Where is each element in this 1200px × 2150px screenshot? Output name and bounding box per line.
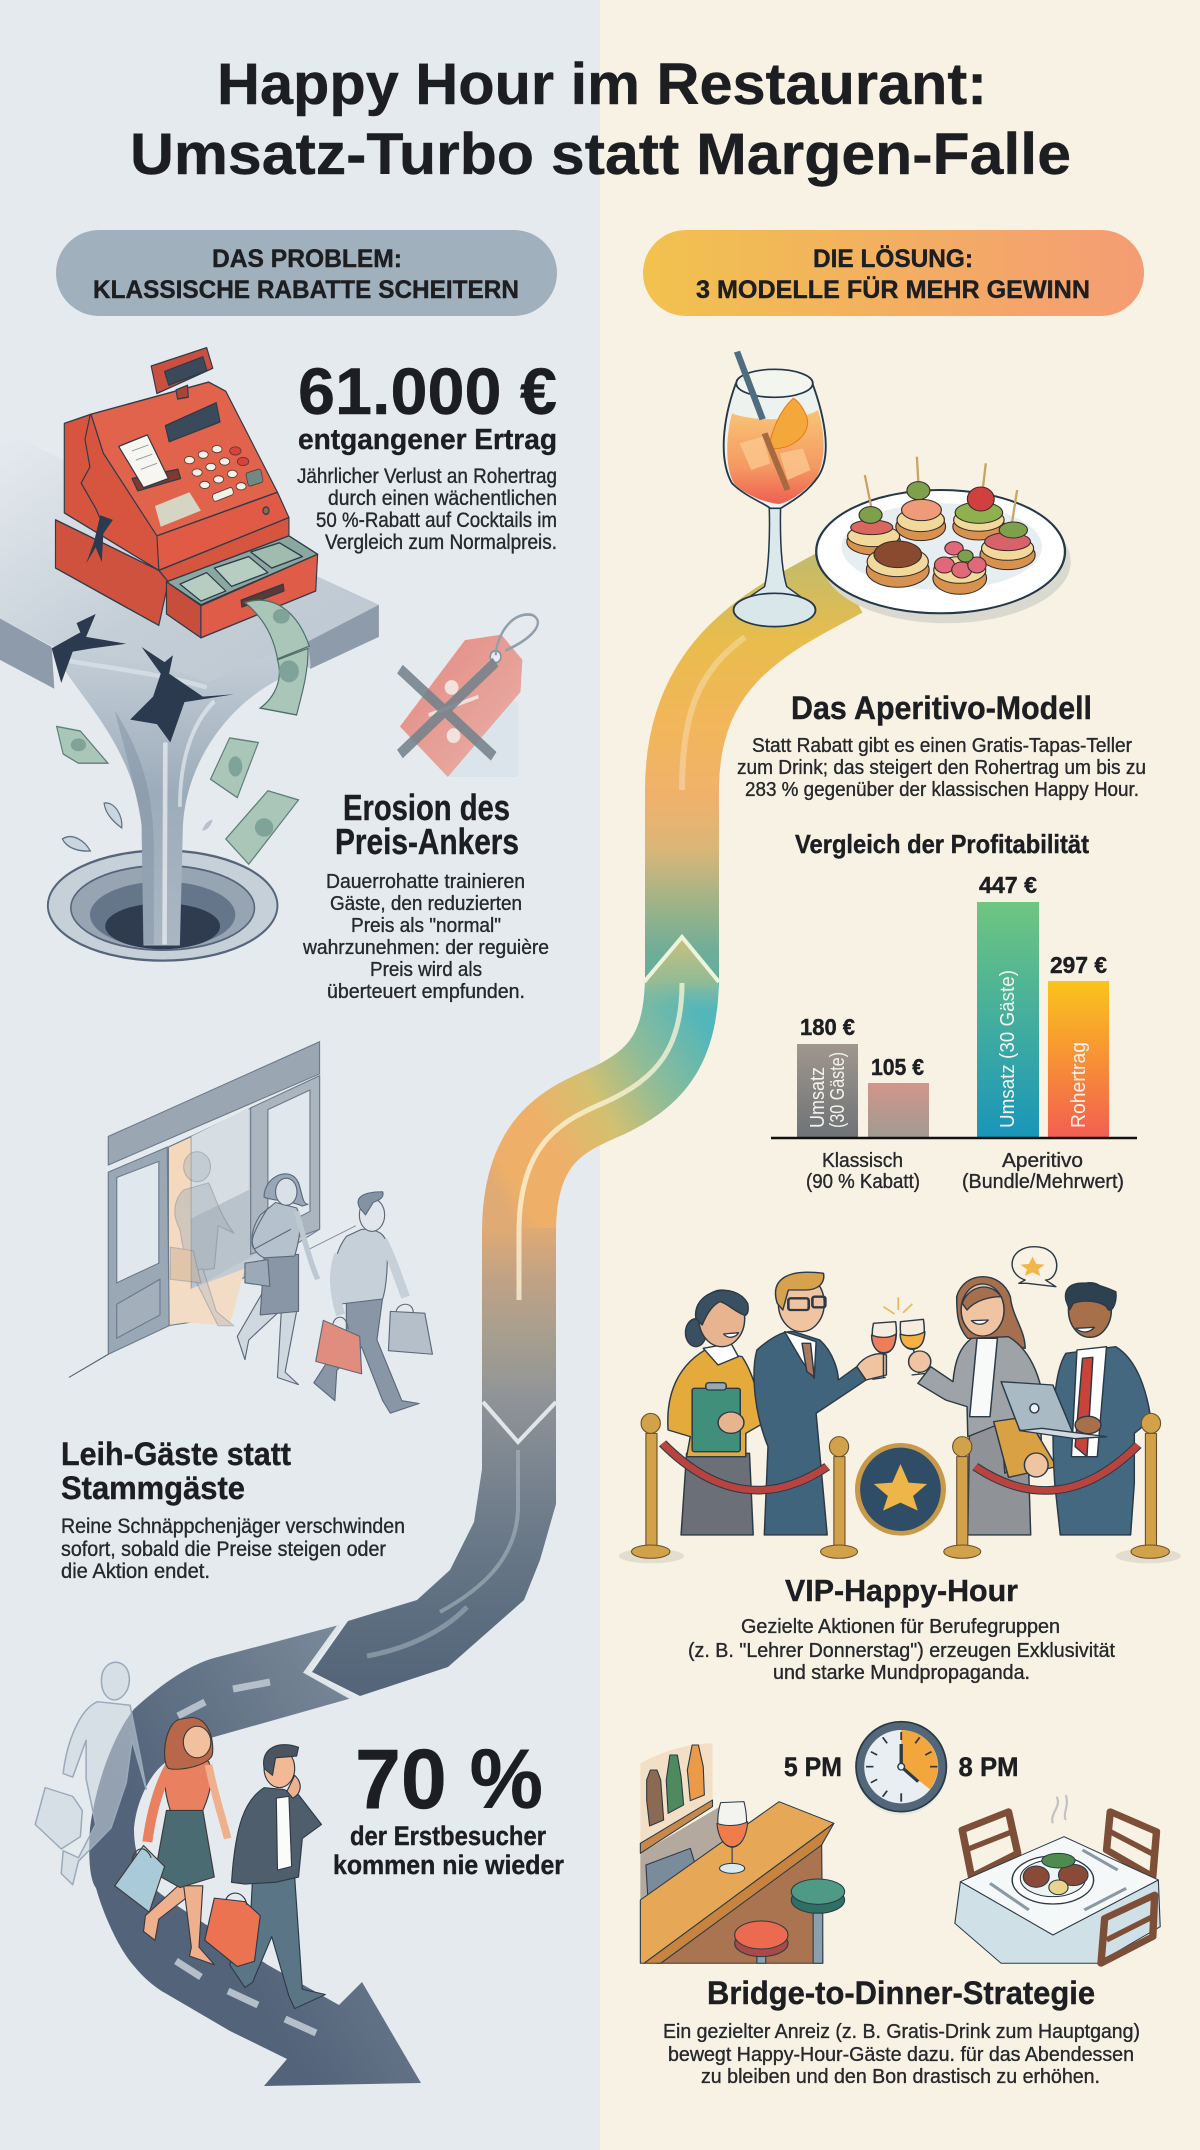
chart heading: Vergleich der Profitabilität: [795, 829, 1089, 859]
background: solution side: [600, 0, 1200, 2150]
text: VIP happy hour: VIP-Happy-Hour: [785, 1573, 1018, 1608]
rope barrier with posts: [619, 1413, 1181, 1563]
text: bridge to dinner: Ein gezielter Anreiz (z. B. Gratis-Drink zum Hauptgang): [663, 2021, 1140, 2043]
illustration: guests leaving restaurant door: [69, 1042, 432, 1413]
stat: 61.000 € lost margin: 50 %-Rabatt auf Cocktails im: [316, 509, 557, 532]
icon: crossed out price tag: [400, 615, 538, 777]
bar chart: profitability comparison: [771, 829, 1137, 1193]
VIP star badge: [858, 1445, 943, 1533]
text: aperitivo model: Das Aperitivo-Modell: [791, 690, 1092, 726]
text: VIP happy hour: (z. B. "Lehrer Donnerstag") erzeugen Exklusivität: [688, 1640, 1115, 1662]
illustration: bar, clock and dinner table: [640, 1722, 1160, 1963]
title: Happy Hour im Restaurant:: [217, 52, 987, 117]
text: bridge to dinner: Bridge-to-Dinner-Strategie: [707, 1975, 1095, 2011]
text: borrowed guests: Stammgäste: [61, 1470, 245, 1506]
water drops: [62, 803, 213, 851]
bar value labels: 180 €: [800, 1014, 855, 1040]
text: borrowed guests: die Aktion endet.: [61, 1560, 210, 1583]
stat: 61.000 € lost margin: durch einen wächentlichen: [328, 487, 557, 510]
text: bridge to dinner: bewegt Happy-Hour-Gäste dazu. für das Abendessen: [668, 2044, 1134, 2066]
heading pill: problem: DAS PROBLEM:: [212, 245, 402, 273]
rotated bar labels: Umsatz: [807, 1067, 829, 1128]
person: teacher: [668, 1290, 806, 1535]
rotated bar labels: (30 Gäste): [827, 1052, 849, 1128]
rotated bar labels: Rohertrag: [1068, 1042, 1090, 1128]
text: borrowed guests: sofort, sobald die Preise steigen oder: [61, 1538, 386, 1561]
falling banknotes: [57, 726, 299, 864]
heading pill: solution: 3 MODELLE FÜR MEHR GEWINN: [696, 275, 1090, 304]
group labels: Aperitivo: [1002, 1150, 1083, 1172]
text: borrowed guests: Leih-Gäste statt: [61, 1436, 291, 1472]
person: woman in grey blazer: [909, 1277, 1057, 1535]
stat: 70 % never return: kommen nie wieder: [333, 1850, 564, 1880]
ghost guest: [35, 1662, 146, 1885]
dinner table with chairs: [955, 1795, 1160, 1963]
group labels: (Bundle/Mehrwert): [962, 1171, 1124, 1193]
bar: aperitivo revenue: [977, 902, 1039, 1138]
text: aperitivo model: [737, 690, 1146, 801]
cocktail glass: [724, 352, 826, 627]
time labels: 8 PM: [959, 1752, 1019, 1782]
bar value labels: 297 €: [1050, 952, 1107, 978]
banknote falling from drawer: [245, 600, 309, 715]
text: price anchor erosion: [302, 787, 549, 1003]
illustration: VIP professionals toasting behind rope: [619, 1247, 1181, 1563]
woman walking away: [237, 1174, 318, 1385]
text: borrowed guests: Reine Schnäppchenjäger verschwinden: [61, 1515, 405, 1538]
arrow: central road from grey problem path to colourful solution path: [483, 580, 845, 1442]
text: price anchor erosion: Preis-Ankers: [335, 821, 519, 862]
stat: 61.000 € lost margin: Vergleich zum Normalpreis.: [325, 531, 557, 554]
bar value labels: 105 €: [871, 1054, 924, 1080]
stat: 61.000 € lost margin: entgangener Ertrag: [298, 424, 557, 456]
text: price anchor erosion: wahrzunehmen: der reguière: [302, 937, 549, 959]
arrow: lower road turning down to exit: [89, 1402, 556, 2086]
man walking away with bags: [314, 1192, 432, 1413]
time labels: 5 PM: [784, 1752, 842, 1782]
leak funnel: [54, 642, 311, 945]
text: price anchor erosion: Gäste, den reduzierten: [330, 893, 522, 915]
register crack: [81, 414, 113, 563]
text: price anchor erosion: überteuert empfunden.: [327, 981, 525, 1003]
text: price anchor erosion: Erosion des: [343, 787, 510, 828]
heading pill: problem: [56, 230, 557, 316]
time labels: [784, 1752, 1019, 1782]
rotated bar labels: Umsatz (30 Gäste): [997, 970, 1019, 1128]
stat: 70 % never return: [333, 1732, 564, 1880]
title: [130, 52, 1071, 187]
text: aperitivo model: 283 % gegenüber der klassischen Happy Hour.: [745, 779, 1139, 801]
text: VIP happy hour: [688, 1573, 1115, 1684]
door frame: [69, 1042, 356, 1377]
clock: 5 PM to 8 PM: [856, 1722, 946, 1815]
drain: [48, 850, 277, 961]
stat: 61.000 € lost margin: [297, 354, 557, 554]
text: borrowed guests: [61, 1436, 405, 1583]
cracks in counter: [52, 614, 234, 743]
woman with blue bag: [115, 1717, 228, 1965]
faded woman leaving: [170, 1152, 233, 1326]
person: suit man with glasses: [754, 1272, 886, 1535]
illustration: cracked counter, leaking drain and cash register: [0, 348, 379, 961]
bar: classic revenue: [797, 1044, 858, 1138]
heading pill: problem: KLASSISCHE RABATTE SCHEITERN: [93, 276, 519, 304]
bar value labels: 447 €: [979, 872, 1037, 898]
tapas canapes: [847, 457, 1035, 594]
counter slab: [0, 430, 379, 689]
man with orange bag: [205, 1745, 325, 2009]
keypad keys: [184, 445, 263, 502]
group labels: [806, 1150, 1124, 1193]
stat: 61.000 € lost margin: Jährlicher Verlust an Rohertrag: [297, 465, 557, 488]
text: price anchor erosion: Dauerrohatte trainieren: [326, 871, 525, 893]
heading pill: solution: DIE LÖSUNG:: [813, 244, 973, 273]
clinking wine glasses: [872, 1297, 926, 1379]
person: man with laptop: [1001, 1283, 1151, 1535]
bar: aperitivo margin: [1048, 981, 1109, 1138]
stat: 70 % never return: 70 %: [355, 1732, 543, 1826]
group labels: (90 % Kabatt): [806, 1171, 920, 1193]
plate: [816, 490, 1071, 623]
bar counter with bottles and stools: [640, 1743, 845, 1963]
text: bridge to dinner: zu bleiben und den Bon drastisch zu erhöhen.: [701, 2066, 1100, 2088]
text: aperitivo model: Statt Rabatt gibt es einen Gratis-Tapas-Teller: [752, 735, 1132, 757]
cash drawer: [166, 536, 318, 638]
text: price anchor erosion: Preis wird als: [370, 959, 482, 981]
text: VIP happy hour: und starke Mundpropaganda.: [773, 1662, 1030, 1684]
text: aperitivo model: zum Drink; das steigert den Rohertrag um bis zu: [737, 757, 1146, 779]
heading pill: solution: [643, 230, 1144, 316]
text: price anchor erosion: Preis als "normal": [351, 915, 501, 937]
background: problem side: [0, 0, 600, 2150]
bar value labels: [800, 872, 1107, 1080]
stat: 61.000 € lost margin: 61.000 €: [298, 354, 557, 428]
illustration: guests walking away on road: [35, 1662, 325, 2009]
cash register: [55, 348, 289, 625]
text: bridge to dinner: [663, 1975, 1140, 2088]
group labels: Klassisch: [822, 1150, 903, 1172]
illustration: aperitivo drink and tapas plate: [724, 352, 1071, 627]
stat: 70 % never return: der Erstbesucher: [350, 1821, 546, 1851]
speech bubble with star: [1012, 1247, 1057, 1287]
title: Umsatz-Turbo statt Margen-Falle: [130, 122, 1071, 187]
bar: classic margin: [868, 1083, 929, 1138]
rotated bar labels: [807, 970, 1090, 1128]
text: VIP happy hour: Gezielte Aktionen für Berufegruppen: [741, 1616, 1060, 1638]
